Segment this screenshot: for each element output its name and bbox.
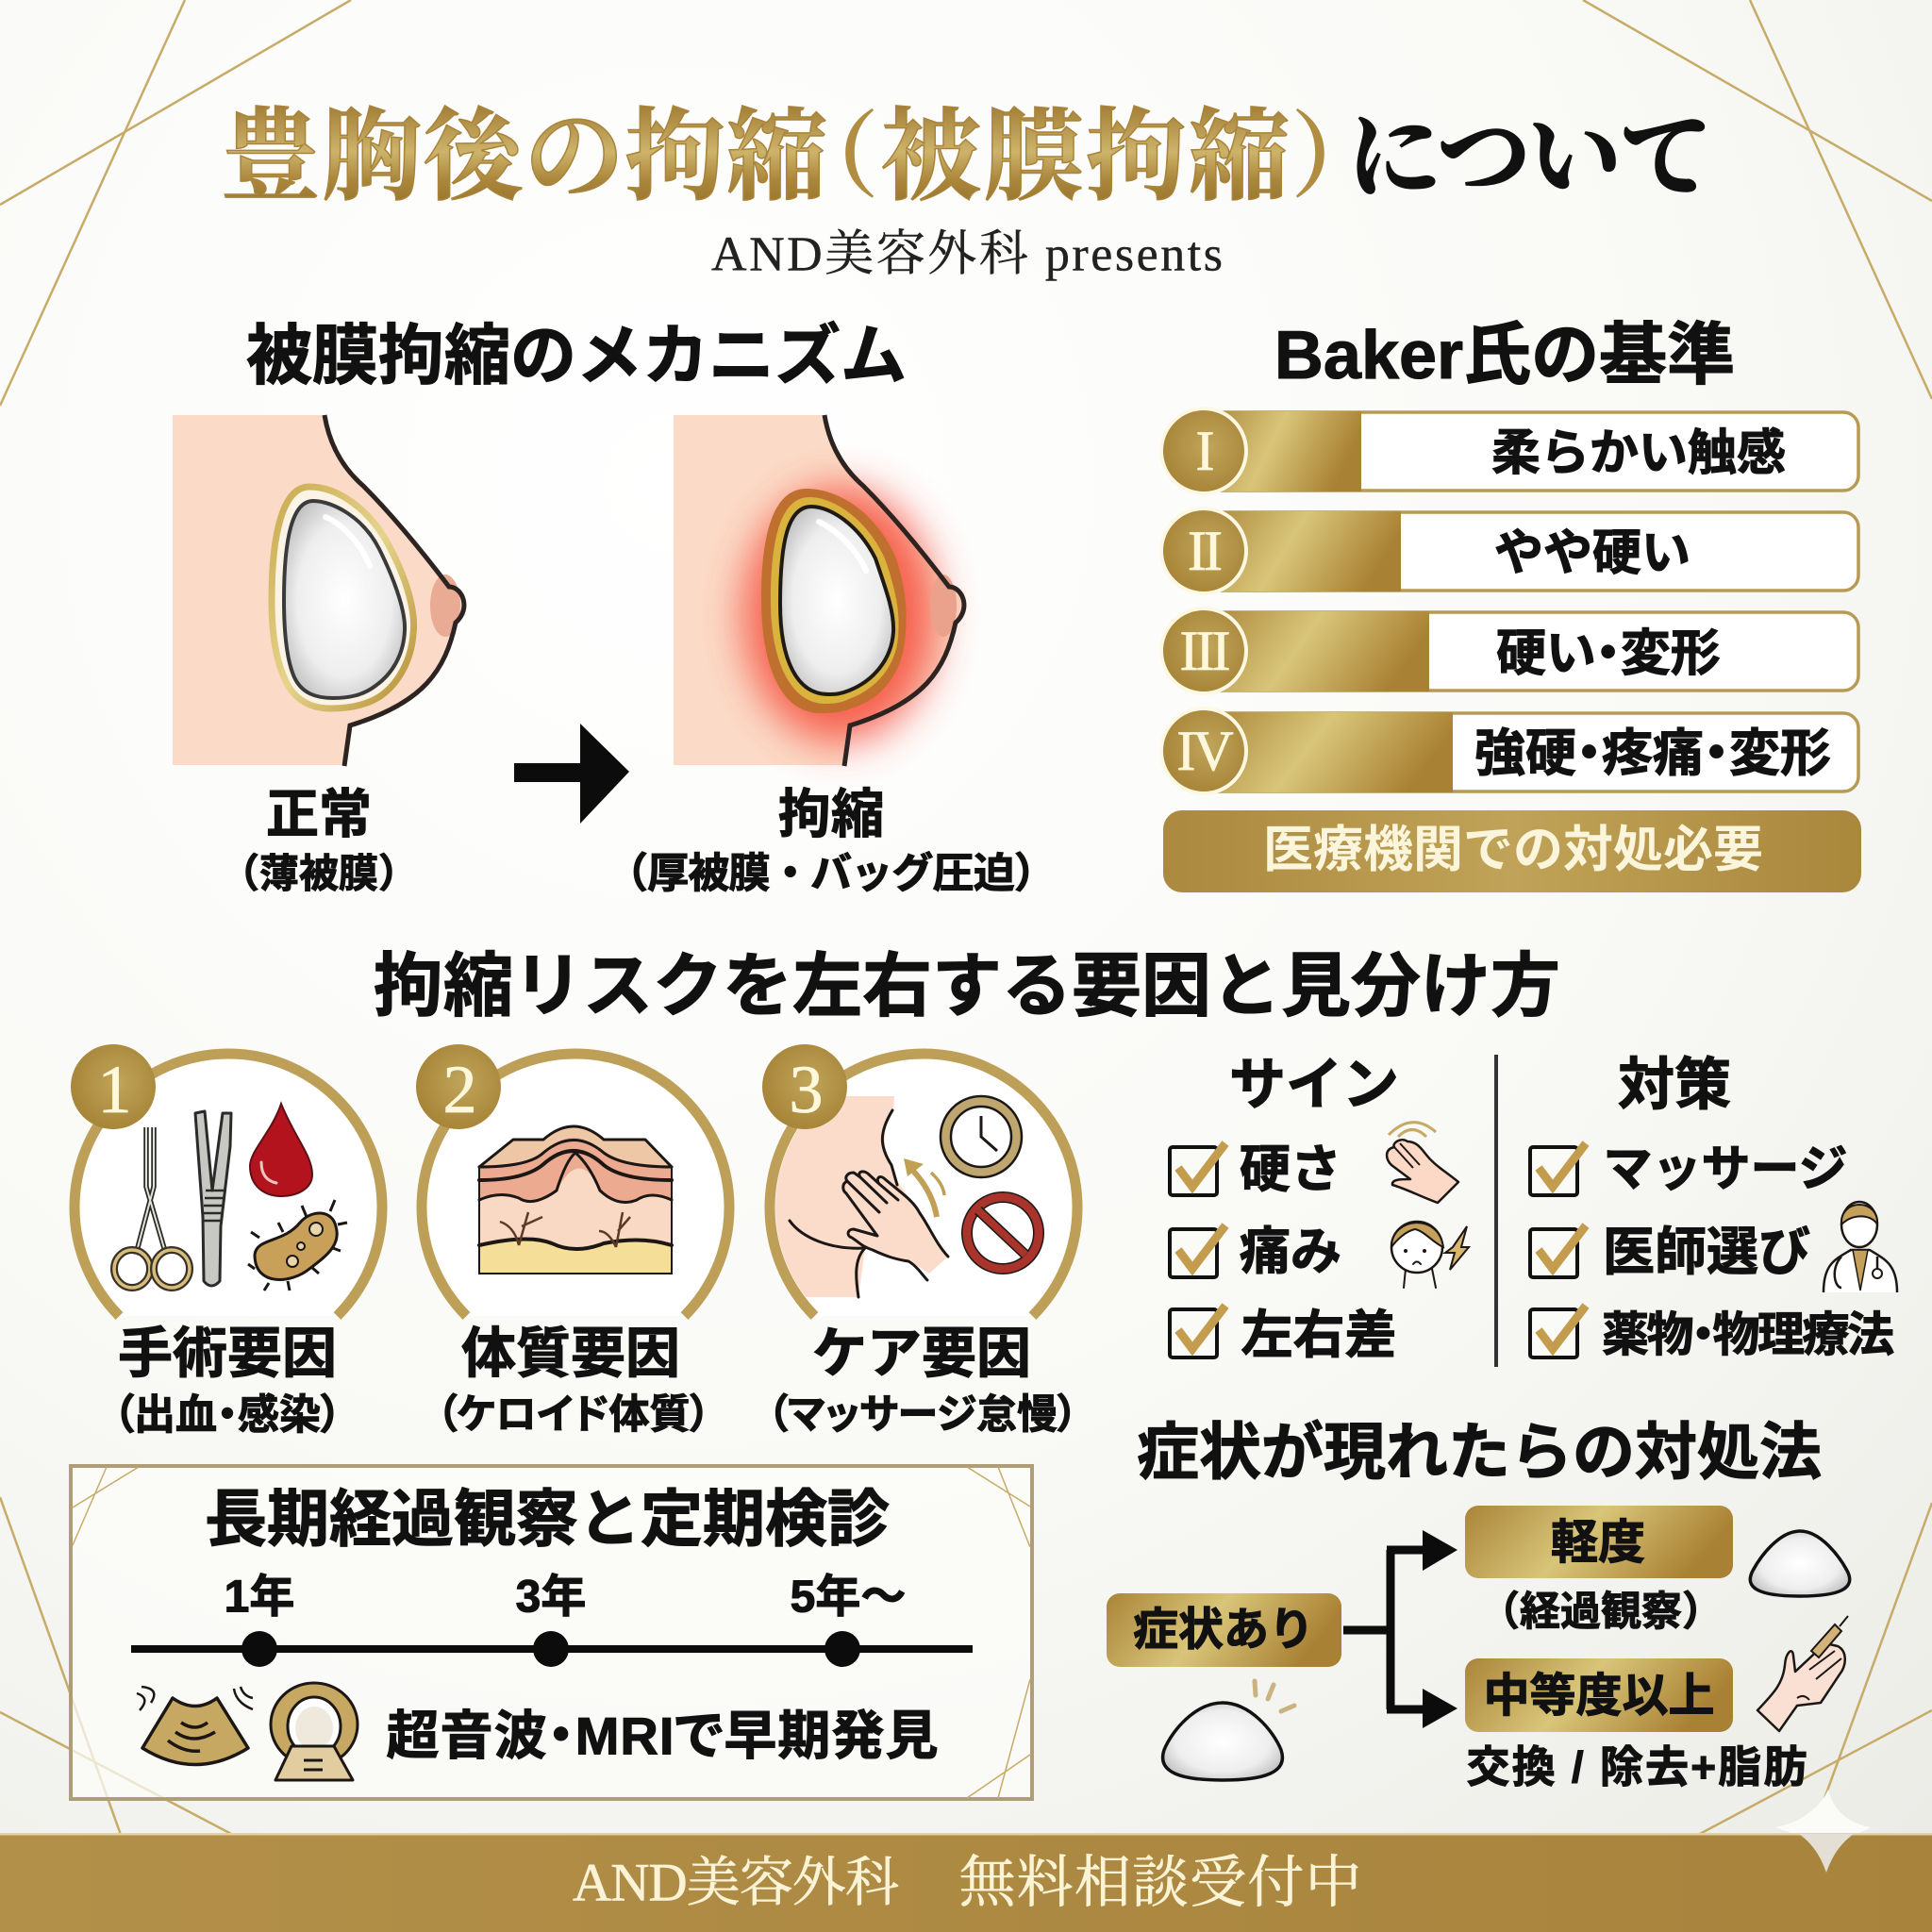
title: 被膜拘縮 xyxy=(881,102,1289,213)
icon: hand xyxy=(1387,1123,1458,1203)
title: について xyxy=(1347,106,1713,209)
label: surgical factor: （出血・感染） xyxy=(113,1392,341,1438)
icon: implant with alert xyxy=(1163,1681,1294,1780)
heading: risk factors: 拘縮リスクを左右する要因と見分け方 xyxy=(374,947,1560,1024)
grade II: II xyxy=(1188,520,1221,582)
grade I xyxy=(1161,408,1858,493)
check: massage: マッサージ xyxy=(1604,1142,1847,1197)
icon: small implant xyxy=(1750,1531,1850,1596)
icon: bacteria xyxy=(248,1200,347,1291)
label: constitution factor: 体質要因 xyxy=(461,1323,680,1385)
icon: forceps xyxy=(114,1127,190,1288)
divider xyxy=(1494,1055,1498,1367)
label: normal: （薄被膜） xyxy=(220,851,418,896)
icon: hand and syringe xyxy=(1757,1616,1848,1731)
factor 3: care xyxy=(762,1044,1077,1438)
panel heading: 長期経過観察と定期検診 xyxy=(205,1484,890,1554)
node: moderate or more: 交換 / 除去+脂肪 xyxy=(1466,1742,1807,1791)
timeline xyxy=(131,1572,973,1667)
icon: face in pain xyxy=(1391,1222,1469,1288)
timeline: 1年 xyxy=(225,1572,294,1623)
panel: long-term follow-up xyxy=(71,1466,1032,1799)
diagram: contracted breast xyxy=(674,415,964,766)
badge 3 xyxy=(762,1044,847,1129)
icon: blood drop xyxy=(250,1104,312,1196)
badge 1: 1 xyxy=(98,1052,128,1127)
icon: clock xyxy=(941,1096,1022,1177)
grade II: やや硬い xyxy=(1494,526,1690,581)
heading: mechanism: 被膜拘縮のメカニズム xyxy=(246,319,907,392)
label: surgical factor: 手術要因 xyxy=(118,1323,337,1385)
branch arrows xyxy=(1343,1530,1457,1728)
check: pain: 痛み xyxy=(1240,1224,1341,1280)
heading: Baker: Baker氏の基準 xyxy=(1274,318,1735,393)
countermeasures list xyxy=(1530,1053,1897,1361)
node: moderate or more: 中等度以上 xyxy=(1483,1671,1715,1722)
icon: massage xyxy=(774,1096,948,1297)
icon: MRI xyxy=(271,1683,358,1780)
check: hardness: 硬さ xyxy=(1240,1141,1341,1198)
arrow: normal to contracture xyxy=(514,724,629,824)
subtitle: AND美容外科 presents xyxy=(711,228,1223,281)
grade III xyxy=(1161,608,1858,693)
badge 1 xyxy=(71,1044,156,1129)
icon: skin layers xyxy=(479,1126,672,1274)
badge 3: 3 xyxy=(789,1052,821,1127)
icon: ultrasound xyxy=(137,1687,253,1764)
check: doctor choice: 医師選び xyxy=(1603,1223,1810,1281)
check: hardness xyxy=(1170,1141,1341,1198)
icon: tweezers xyxy=(195,1111,231,1286)
check: asymmetry: 左右差 xyxy=(1241,1306,1397,1364)
grade II xyxy=(1161,508,1858,593)
diagram: normal breast xyxy=(173,415,464,766)
label: care factor: ケア要因 xyxy=(812,1323,1031,1385)
factor 2: constitution xyxy=(416,1044,729,1438)
sparkle xyxy=(1775,1790,1871,1836)
grade IV: IV xyxy=(1176,720,1233,782)
title: ） xyxy=(1291,106,1385,209)
medical attention banner: 医療機関での対処必要 xyxy=(1263,823,1763,877)
factor 1: surgery xyxy=(71,1044,382,1438)
label: care factor xyxy=(768,1323,1077,1438)
badge 2: 2 xyxy=(443,1052,474,1127)
check: pain xyxy=(1170,1224,1341,1280)
label: contracture: （厚被膜・バッグ圧迫） xyxy=(607,851,1056,896)
label: contracture xyxy=(607,785,1056,896)
medical attention banner xyxy=(1163,810,1861,892)
node: moderate or more xyxy=(1465,1658,1807,1791)
label: constitution factor: （ケロイド体質） xyxy=(437,1392,710,1438)
grade IV xyxy=(1161,708,1858,793)
early detection text: 超音波・MRIで早期発見 xyxy=(387,1706,938,1766)
Baker grades xyxy=(1161,408,1861,892)
label: constitution factor xyxy=(437,1323,710,1438)
title: 豊胸後の拘縮 xyxy=(221,102,826,213)
countermeasures list: 対策 xyxy=(1618,1053,1731,1117)
timeline: 5年〜 xyxy=(791,1572,906,1623)
label: normal xyxy=(220,785,418,896)
grade I: I xyxy=(1196,420,1213,482)
grade IV: 強硬・疼痛・変形 xyxy=(1474,725,1831,782)
signs list: サイン xyxy=(1229,1053,1399,1117)
node: mild: （経過観察） xyxy=(1479,1590,1723,1635)
node: symptoms: 症状あり xyxy=(1133,1606,1314,1655)
heading: response: 症状が現れたらの対処法 xyxy=(1137,1417,1822,1487)
grade I: 柔らかい触感 xyxy=(1491,426,1786,481)
badge 2 xyxy=(416,1044,501,1129)
footer banner: 無料相談受付中 xyxy=(958,1852,1362,1914)
check: medication and physio: 薬物・物理療法 xyxy=(1602,1308,1894,1361)
check: asymmetry xyxy=(1170,1306,1397,1364)
flow chart xyxy=(1107,1506,1850,1791)
title: （ xyxy=(785,106,879,209)
label: surgical factor xyxy=(113,1323,341,1438)
footer banner: AND美容外科 xyxy=(573,1853,899,1913)
label: contracture: 拘縮 xyxy=(778,785,884,843)
grade III: 硬い・変形 xyxy=(1496,626,1721,681)
node: symptoms xyxy=(1107,1593,1341,1667)
label: normal: 正常 xyxy=(266,785,372,843)
grade III: III xyxy=(1180,620,1228,682)
timeline: 3年 xyxy=(516,1572,586,1623)
title xyxy=(221,102,1713,213)
node: mild: 軽度 xyxy=(1551,1516,1645,1569)
node: mild xyxy=(1465,1506,1733,1635)
icon: prohibited xyxy=(967,1197,1039,1269)
footer banner xyxy=(0,1833,1932,1932)
label: care factor: （マッサージ怠慢） xyxy=(768,1392,1077,1438)
signs list xyxy=(1170,1053,1469,1364)
icon: doctor xyxy=(1824,1202,1897,1292)
